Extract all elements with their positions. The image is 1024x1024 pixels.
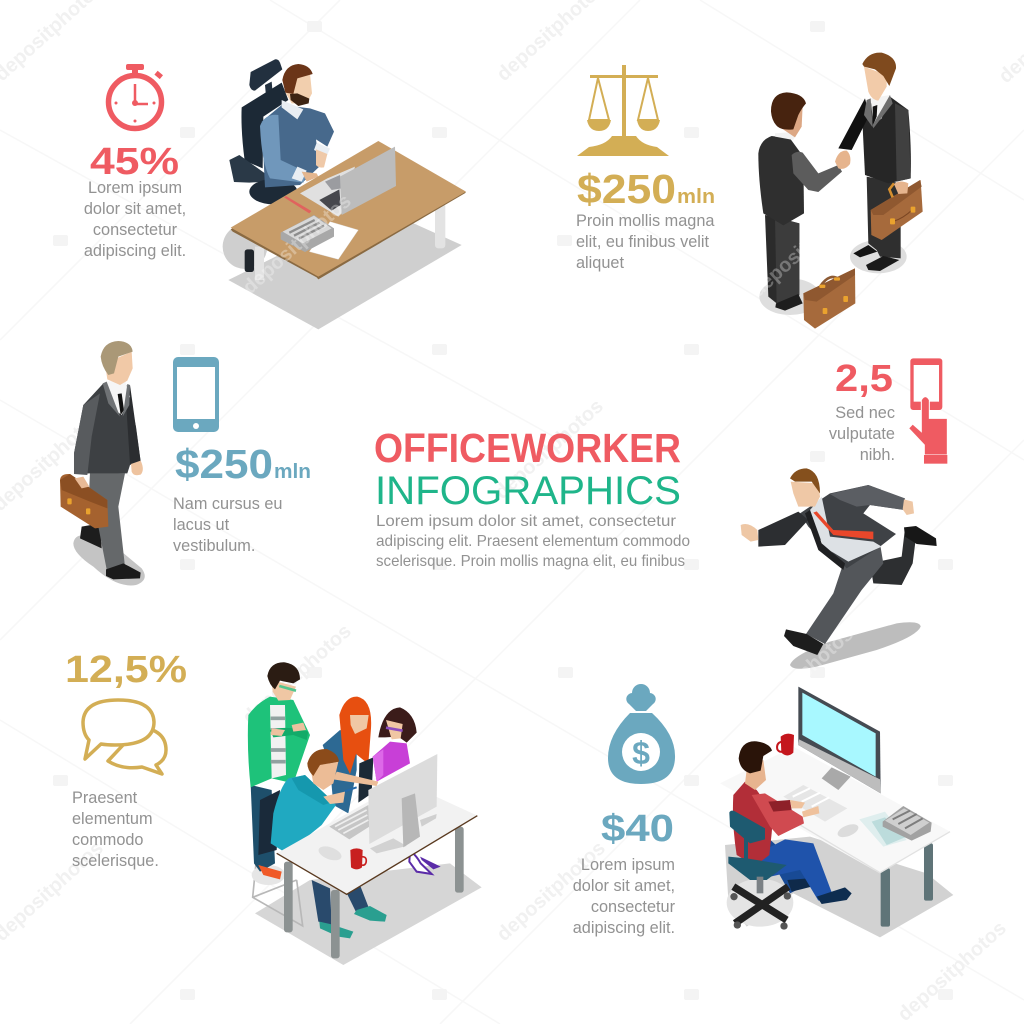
text: depositphotos	[747, 193, 864, 302]
text block: walking man description: vestibulum.	[173, 537, 255, 555]
text block: team description: elementum	[72, 810, 153, 828]
text block: computer worker description: consectetur	[591, 898, 676, 916]
panel: walking businessman stat	[60, 341, 311, 585]
text block: team description: Praesent	[72, 789, 138, 807]
icon: money bag: $	[632, 735, 650, 771]
illustration: man at desktop computer	[720, 687, 953, 937]
text block: computer worker description: adipiscing elit.	[573, 919, 675, 937]
text block: desk worker description: Lorem ipsum	[88, 179, 182, 197]
icon: money bag	[608, 684, 675, 784]
stat: 45%: 45%	[90, 141, 179, 183]
stat: $250 mln gold: $250	[577, 166, 676, 212]
stat: $250 mln gold: mln	[677, 186, 715, 208]
icon: stopwatch	[108, 64, 163, 128]
heading: officeworker: OFFICEWORKER	[374, 425, 681, 471]
text block: desk worker description	[84, 179, 186, 260]
text block: intro: adipiscing elit. Praesent elementum commodo	[376, 533, 690, 550]
text: depositphotos	[493, 837, 610, 946]
stat: $250 mln teal: $250	[175, 441, 273, 487]
stat: 2,5: 2,5	[835, 358, 893, 400]
text block: intro: scelerisque. Proin mollis magna elit, eu finibus	[376, 553, 685, 570]
text block: handshake description: Proin mollis magna	[576, 212, 715, 230]
panel: computer worker stat	[573, 684, 953, 937]
text block: desk worker description: adipiscing elit.	[84, 242, 186, 260]
text: depositphotos	[239, 190, 356, 299]
stat: $40: $40	[601, 808, 674, 850]
panel: team stat	[65, 649, 482, 965]
text block: team description	[72, 789, 159, 870]
text: depositphotos	[741, 623, 858, 732]
text block: intro	[376, 513, 690, 570]
text block: walking man description: lacus ut	[173, 516, 230, 534]
text block: handshake description: elit, eu finibus velit	[576, 233, 710, 251]
icon: scales	[577, 65, 669, 156]
text block: computer worker description: Lorem ipsum	[581, 856, 675, 874]
panel: handshake stat	[576, 53, 923, 329]
panel: desk worker stat	[84, 59, 466, 329]
illustration: two businessmen shaking hands	[758, 53, 923, 329]
stat: 12,5%: 12,5%	[65, 649, 187, 691]
text block: running man description: vulputate	[829, 425, 895, 443]
text block: desk worker description: consectetur	[93, 221, 178, 239]
text: depositphotos	[491, 395, 608, 504]
icon: finger tapping phone	[909, 358, 947, 464]
text block: running man description: nibh.	[860, 446, 895, 464]
illustration: team gathered around computer	[248, 662, 482, 965]
illustration: businessman walking with briefcase	[60, 341, 145, 585]
text block: team description: scelerisque.	[72, 852, 159, 870]
icon: speech bubbles	[83, 700, 166, 774]
text: depositphotos	[239, 620, 356, 729]
text block: walking man description: Nam cursus eu	[173, 495, 282, 513]
title block	[374, 425, 690, 570]
text block: desk worker description: dolor sit amet,	[84, 200, 186, 218]
icon: smartphone	[173, 357, 219, 432]
text block: running man description: Sed nec	[835, 404, 895, 422]
panel: running businessman stat	[741, 358, 947, 669]
text block: handshake description	[576, 212, 715, 272]
heading: infographics: INFOGRAPHICS	[375, 469, 681, 513]
text block: walking man description	[173, 495, 282, 555]
text block: computer worker description	[573, 856, 676, 937]
text block: running man description	[829, 404, 895, 464]
illustration: man working on laptop at desk	[223, 59, 466, 329]
text block: team description: commodo	[72, 831, 144, 849]
text block: handshake description: aliquet	[576, 254, 624, 272]
text block: computer worker description: dolor sit amet,	[573, 877, 675, 895]
text block: intro: Lorem ipsum dolor sit amet, consectetur	[376, 513, 676, 530]
stat: $250 mln teal: mln	[274, 461, 311, 483]
text: depositphotos	[894, 917, 1011, 1024]
illustration: businessman running	[741, 468, 937, 669]
